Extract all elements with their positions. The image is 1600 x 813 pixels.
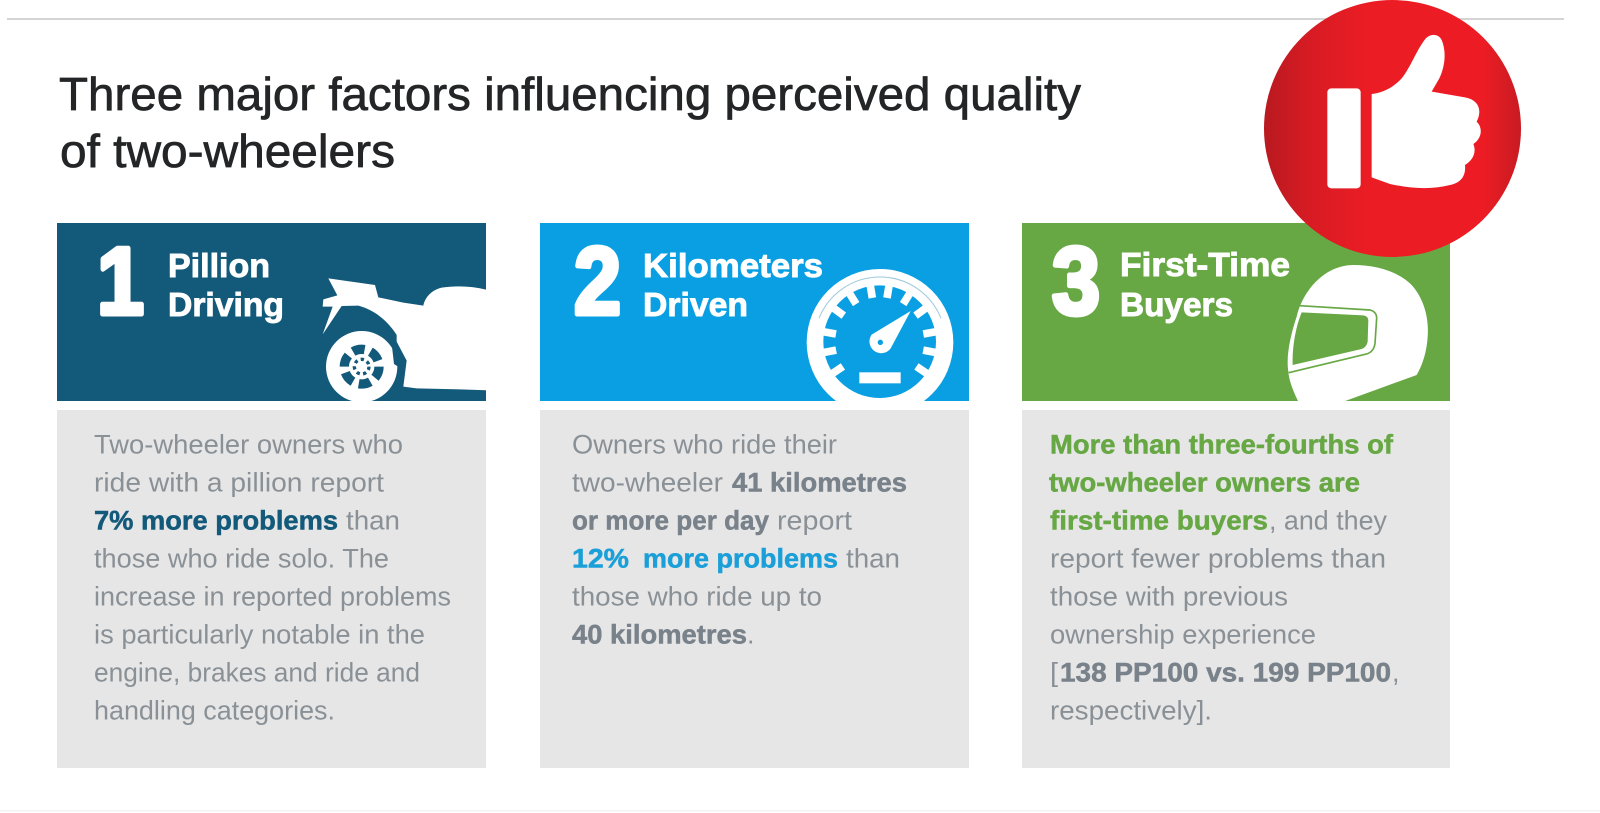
text: kilometers driven [572, 430, 907, 650]
heading: pillion driving: Pillion [168, 247, 270, 284]
text: kilometers driven: 12% [572, 544, 629, 574]
icon: motorcycle [323, 278, 490, 402]
text: kilometers driven: those who ride up to [572, 582, 822, 612]
text: first-time buyers: 138 PP100 vs. 199 PP100 [1060, 658, 1391, 688]
panel: pillion driving [57, 223, 490, 768]
text: kilometers driven: or more per day [572, 506, 769, 536]
text: kilometers driven: two-wheeler [572, 468, 723, 498]
number 3: 3 [1052, 228, 1100, 335]
panel body: pillion driving [57, 410, 486, 768]
text: first-time buyers: two-wheeler owners are [1049, 468, 1360, 498]
heading: first-time buyers [1120, 246, 1290, 323]
text: first-time buyers: ownership experience [1050, 620, 1316, 650]
text: first-time buyers: first-time buyers [1050, 506, 1268, 536]
text: pillion driving: is particularly notable in the [94, 620, 425, 650]
panel header: kilometers driven [540, 223, 969, 401]
title: of two-wheelers [60, 125, 395, 177]
panel header: pillion driving [57, 223, 486, 401]
text: kilometers driven: more problems [643, 544, 838, 574]
panel body: first-time buyers [1022, 410, 1450, 768]
text: kilometers driven: . [747, 620, 755, 650]
panel: kilometers driven [540, 223, 969, 768]
heading: kilometers driven: Kilometers [643, 247, 823, 284]
title [59, 68, 1081, 177]
text: kilometers driven: 41 kilometres [732, 468, 907, 498]
text: pillion driving: Two-wheeler owners who [94, 430, 403, 460]
text: kilometers driven: 40 kilometres [572, 620, 747, 650]
text: first-time buyers: [ [1050, 658, 1059, 688]
text: first-time buyers: respectively]. [1050, 696, 1212, 726]
panel header: first-time buyers [1022, 223, 1450, 401]
text: first-time buyers: report fewer problems than [1050, 544, 1386, 574]
text: pillion driving: handling categories. [94, 696, 335, 726]
panel body: kilometers driven [540, 410, 969, 768]
icon: helmet [1288, 265, 1428, 405]
text: kilometers driven: than [846, 544, 900, 574]
text: pillion driving: those who ride solo. The [94, 544, 389, 574]
heading: pillion driving: Driving [168, 286, 284, 323]
icon: thumbs up badge [1264, 0, 1521, 257]
text: pillion driving: 7% more problems [94, 506, 338, 536]
text: first-time buyers: , [1392, 658, 1400, 688]
heading: kilometers driven [643, 247, 823, 323]
heading: first-time buyers: Buyers [1120, 286, 1233, 323]
heading: pillion driving [168, 247, 284, 323]
icon: speedometer [807, 269, 953, 416]
heading: first-time buyers: First-Time [1120, 246, 1290, 283]
number 1: 1 [97, 228, 144, 335]
text: pillion driving: increase in reported problems [94, 582, 451, 612]
text: pillion driving [94, 430, 451, 726]
panel: first-time buyers [1022, 223, 1450, 768]
text: first-time buyers: those with previous [1050, 582, 1288, 612]
text: first-time buyers: , and they [1269, 506, 1387, 536]
text: pillion driving: engine, brakes and ride and [94, 658, 420, 688]
number 2: 2 [574, 228, 621, 335]
heading: kilometers driven: Driven [643, 286, 748, 323]
text: first-time buyers [1049, 430, 1400, 726]
text: kilometers driven: report [777, 506, 853, 536]
text: pillion driving: ride with a pillion report [94, 468, 385, 498]
text: first-time buyers: More than three-fourths of [1050, 430, 1394, 460]
title: Three major factors influencing perceived quality [59, 68, 1081, 120]
text: kilometers driven: Owners who ride their [572, 430, 837, 460]
text: pillion driving: than [346, 506, 400, 536]
